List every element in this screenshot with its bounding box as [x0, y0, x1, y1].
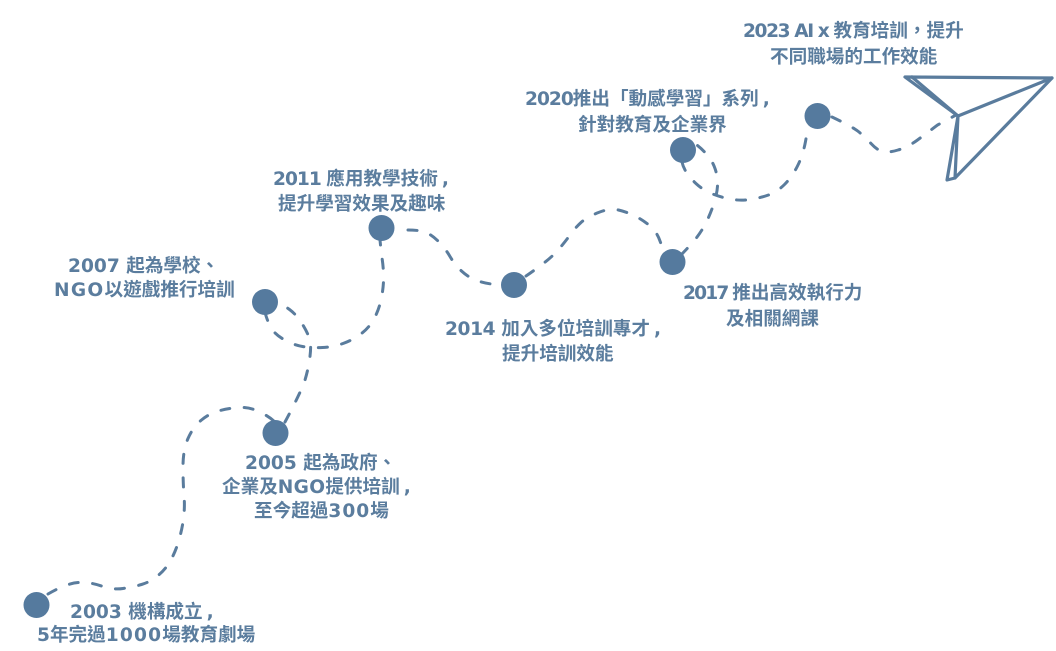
label: 2005: 至今超過300場 [254, 500, 389, 522]
dashed path: 2017 to 2020 [681, 143, 718, 255]
milestone dot: 2005 [262, 420, 288, 446]
milestone dot: 2003 [24, 592, 50, 618]
label: 2003: 2003 機構成立, [70, 601, 214, 623]
label: 2020 [525, 88, 770, 136]
label: 2014: 2014 加入多位培訓專才, [445, 318, 661, 340]
milestone dot: 2011 [368, 215, 394, 241]
milestone dot: 2020 [670, 137, 696, 163]
label: 2003 [37, 601, 256, 646]
label: 2011: 2011 應用教學技術, [273, 168, 449, 190]
milestone dot: 2017 [660, 249, 686, 275]
label: 2023: 2023 AI x 教育培訓，提升 [743, 16, 964, 43]
label: 2020: 2020推出「動感學習」系列, [525, 88, 770, 110]
milestone dot: 2007 [252, 289, 278, 315]
label: 2014: 提升培訓效能 [502, 343, 614, 365]
dashed path: 2005 to 2007 [274, 301, 311, 422]
label: 2007: NGO以遊戲推行培訓 [54, 279, 235, 301]
dashed path: 2014 to 2017 [526, 209, 664, 276]
label: 2005: 企業及NGO提供培訓, [222, 476, 411, 498]
label: 2011 [273, 168, 449, 215]
label: 2007: 2007 起為學校、 [68, 251, 219, 278]
milestone dot: 2014 [501, 272, 527, 298]
label: 2020: 針對教育及企業界 [578, 114, 727, 136]
icon: paper plane [905, 77, 1052, 180]
label: 2023: 不同職場的工作效能 [770, 47, 938, 68]
label: 2005 [222, 448, 411, 522]
label: 2017: 及相關網課 [726, 309, 819, 330]
dashed path: 2011 to 2014 [408, 230, 505, 285]
label: 2005: 2005 起為政府、 [245, 448, 396, 475]
label: 2014 [445, 318, 661, 365]
milestone dot: 2023 [804, 103, 830, 129]
dashed path: 2023 to paper plane [832, 115, 956, 152]
label: 2017 [683, 282, 862, 330]
label: 2023 [743, 16, 964, 68]
label: 2007 [54, 251, 235, 301]
label: 2011: 提升學習效果及趣味 [278, 193, 446, 215]
dashed path: 2007 to 2011 [265, 240, 384, 348]
label: 2003: 5年完過1000場教育劇場 [37, 624, 256, 646]
dashed path: 2003 to 2005 [48, 407, 276, 594]
dashed path: 2020 to 2023 [682, 128, 808, 200]
label: 2017: 2017 推出高效執行力 [683, 282, 862, 304]
